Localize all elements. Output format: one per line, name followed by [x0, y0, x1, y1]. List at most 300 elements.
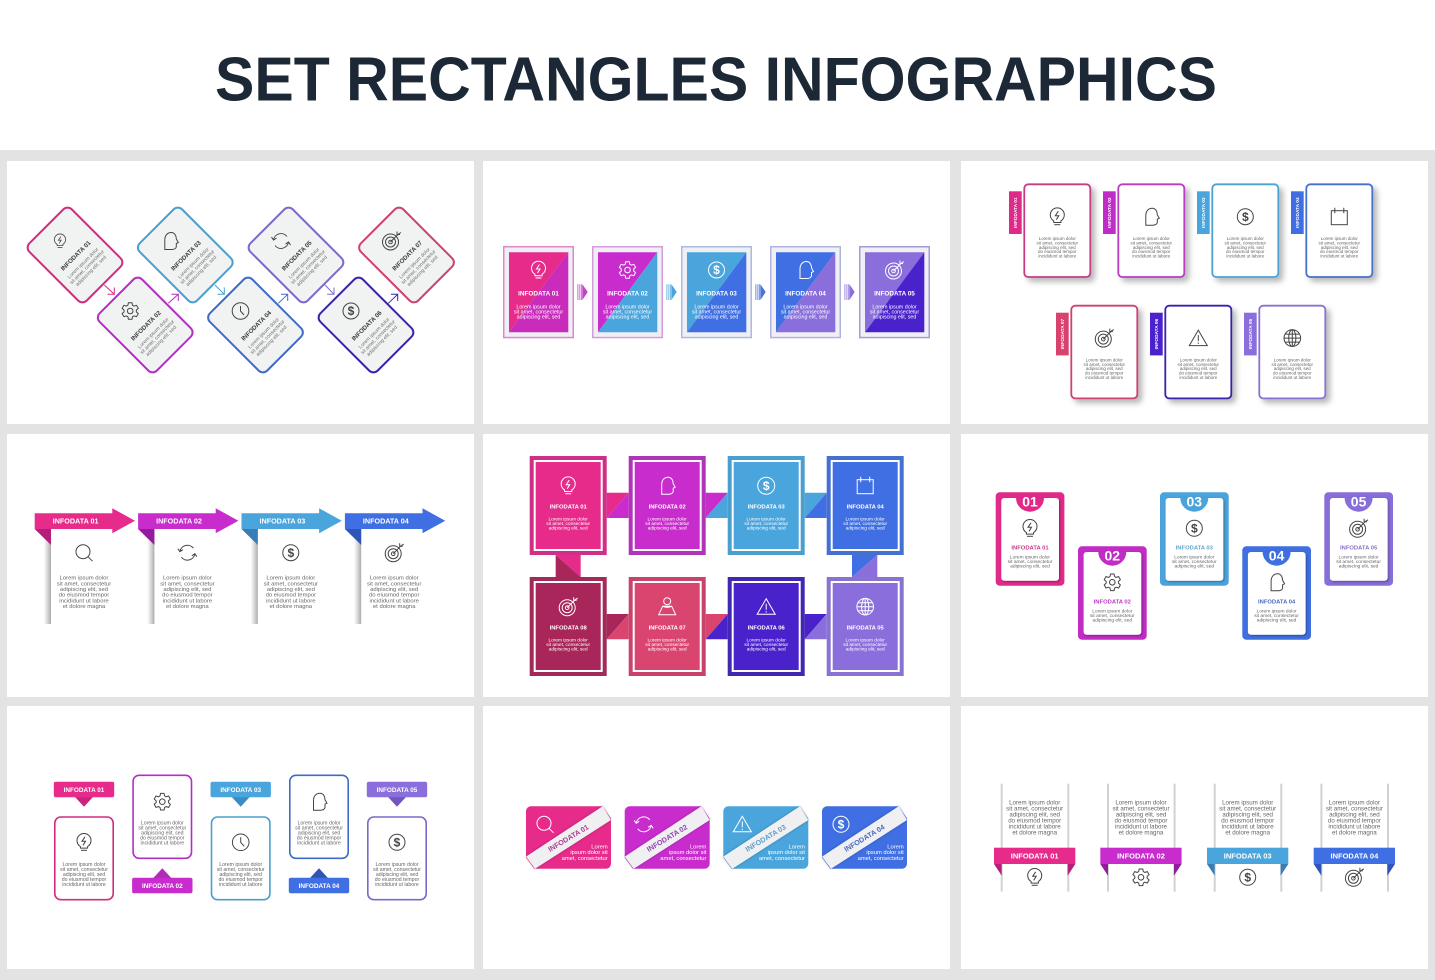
card 02 text: sit amet, consectetur — [1090, 613, 1135, 619]
column 01 text: do eiusmod tempor — [1008, 817, 1061, 824]
panel: outlined cards with vertical tags — [961, 161, 1428, 424]
card 06 text: adipiscing elit, sed — [1180, 366, 1217, 371]
card 05 text — [1336, 546, 1381, 570]
icon: target — [1095, 329, 1114, 347]
card 04 text: Lorem ipsum dolor — [1257, 608, 1297, 614]
card 03 — [722, 805, 809, 870]
card 04 text: adipiscing elit, sed — [1321, 245, 1358, 250]
connector 06 to 07 — [706, 614, 728, 639]
card 04 text: INFODATA 04 — [240, 309, 273, 342]
card 07 text: Lorem ipsum dolor — [1086, 358, 1123, 363]
card 03 text: sit amet, consectetur — [692, 309, 741, 315]
icon: target — [1345, 868, 1364, 886]
card 01 text: amet, consectetur — [562, 856, 608, 862]
item 03 — [210, 782, 271, 900]
card 06 text: sit amet, consectetur — [1178, 362, 1220, 367]
card 01 — [525, 805, 612, 870]
item 05 text: Lorem ipsum dolor — [376, 862, 419, 868]
column 04 text: sit amet, consectetur — [1326, 805, 1383, 812]
icon: head — [1271, 574, 1285, 591]
icon: target — [382, 232, 401, 250]
step 04 text: do eiusmod tempor — [369, 593, 419, 599]
item 01 text: incididunt ut labore — [62, 882, 106, 888]
card 01 text: adipiscing elit, sed — [1010, 564, 1050, 570]
number tab 02: 02 — [1105, 548, 1120, 564]
step 03 text: do eiusmod tempor — [266, 593, 316, 599]
card 05 text: INFODATA 05 — [847, 626, 885, 632]
column 02 text: sit amet, consectetur — [1112, 805, 1170, 812]
card 01 text: incididunt ut labore — [1038, 253, 1077, 258]
card 07 text: sit amet, consectetur — [645, 642, 690, 648]
icon: dollar: $ — [838, 817, 845, 831]
item 01 text: adipiscing elit, sed — [63, 872, 105, 878]
item 04 text: do eiusmod tempor — [297, 836, 341, 842]
step 03 text: adipiscing elit, sed — [267, 587, 315, 593]
icon: bulb — [532, 261, 546, 278]
card 07 text: INFODATA 07 — [391, 239, 424, 272]
card 04 text: incididunt ut labore — [1320, 253, 1359, 258]
card 03 text: ipsum dolor sit — [768, 850, 805, 856]
card 04 text: amet, consectetur — [858, 856, 904, 862]
card 01 text: sit amet, consectetur — [69, 249, 106, 286]
card 03 text: sit amet, consectetur — [179, 249, 216, 286]
card 07 text: adipiscing elit, sed — [406, 255, 439, 288]
icon: bulb — [1050, 208, 1064, 225]
icon: warning — [733, 816, 751, 832]
column 04 text: et dolore magna — [1332, 829, 1377, 836]
step 02 text: incididunt ut labore — [163, 598, 213, 604]
card 06 text: do eiusmod tempor — [1179, 371, 1218, 376]
vertical tag 07: INFODATA 07 — [1060, 318, 1066, 349]
card 06 text: incididunt ut labore — [1179, 375, 1218, 380]
card 05 text: Lorem ipsum dolor — [1339, 554, 1379, 560]
panel background — [7, 706, 474, 969]
column 01 text: sit amet, consectetur — [1006, 805, 1063, 812]
card 02 text: adipiscing elit, sed — [145, 325, 178, 358]
panel: connected coloured squares loop — [483, 434, 950, 697]
card 01 text — [514, 290, 563, 320]
card 02 text — [1090, 600, 1135, 624]
icon: dollar: $ — [1242, 210, 1249, 224]
card 01 text: Lorem ipsum dolor — [516, 304, 561, 310]
card 03 text: Lorem ipsum dolor — [177, 246, 211, 280]
column 01 text: et dolore magna — [1012, 829, 1058, 836]
icon: dollar: $ — [1244, 870, 1251, 884]
connector 04 to 05 — [852, 555, 877, 577]
column 01 text: incididunt ut labore — [1009, 823, 1061, 830]
card 06 text: Lorem ipsum dolor — [747, 637, 786, 643]
icon: head — [800, 262, 814, 278]
arrow 6 to 7 — [388, 294, 398, 303]
icon: globe — [1284, 330, 1301, 346]
card 03 text: sit amet, consectetur — [744, 521, 789, 527]
column 03 text: Lorem ipsum dolor — [1222, 799, 1273, 806]
card 03 text: sit amet, consectetur — [1172, 559, 1217, 565]
card 04 text: sit amet, consectetur — [1254, 613, 1299, 619]
card 07 text: sit amet, consectetur — [400, 249, 438, 286]
card 05 text — [843, 626, 888, 653]
card 03 text: adipiscing elit, sed — [1175, 564, 1214, 570]
card 01 text: INFODATA 01 — [550, 504, 588, 510]
icon: dollar: $ — [348, 304, 355, 318]
ribbon 02: INFODATA 02 — [1117, 852, 1165, 861]
card 05 text: adipiscing elit, sed — [296, 255, 329, 288]
ribbon 01: INFODATA 01 — [1011, 852, 1059, 861]
card 05 text: adipiscing elit, sed — [1339, 564, 1379, 570]
card 02 text — [603, 290, 652, 320]
panel background — [961, 161, 1428, 424]
icon: bulb — [1028, 868, 1042, 885]
card 07 text: sit amet, consectetur — [1084, 362, 1126, 367]
card 04 text: Lorem ipsum dolor — [846, 516, 885, 522]
card 01 text: Lorem ipsum dolor — [549, 516, 588, 522]
card 03 text: adipiscing elit, sed — [695, 314, 738, 320]
panel background — [483, 706, 950, 969]
card 02 text: do eiusmod tempor — [1132, 249, 1171, 254]
card 04 text: adipiscing elit, sed — [1257, 618, 1297, 624]
step 04 text: sit amet, consectetur — [367, 581, 421, 587]
item 04 text: incididunt ut labore — [297, 841, 341, 847]
card 04 — [827, 456, 904, 555]
step 01 text: incididunt ut labore — [59, 598, 109, 604]
card 04 — [1291, 184, 1372, 277]
card 02 text: amet, consectetur — [660, 856, 706, 862]
icon: dollar: $ — [287, 546, 294, 560]
card 02 text: Lorem — [690, 844, 707, 850]
card 03 text: Lorem ipsum dolor — [747, 516, 786, 522]
arrow 5 to 6 — [325, 285, 334, 294]
icon: bulb — [561, 477, 575, 494]
icon: gear — [1133, 869, 1149, 886]
icon: gear — [154, 793, 170, 810]
card 05 text: Lorem ipsum dolor — [846, 637, 885, 643]
column 01 text: adipiscing elit, sed — [1009, 811, 1061, 818]
step 01 — [35, 508, 135, 624]
item 04 text: sit amet, consectetur — [295, 826, 343, 832]
card 07 text: INFODATA 07 — [649, 626, 686, 632]
card 08 text: Lorem ipsum dolor — [549, 637, 588, 643]
card 03 text: adipiscing elit, sed — [185, 255, 218, 288]
panel: ribbon columns — [961, 706, 1428, 969]
card 04 text: do eiusmod tempor — [1320, 249, 1359, 254]
panel background — [483, 434, 950, 697]
step 02 — [138, 508, 238, 624]
step 04 text: Lorem ipsum dolor — [370, 576, 419, 582]
step 01 text: Lorem ipsum dolor — [60, 576, 108, 582]
column 03 text: adipiscing elit, sed — [1222, 811, 1274, 818]
card 02 text: sit amet, consectetur — [603, 309, 652, 315]
arrow header 01: INFODATA 01 — [53, 516, 98, 525]
item 05 text: adipiscing elit, sed — [376, 872, 418, 878]
icon: gear — [619, 262, 636, 278]
step 02 text: et dolore magna — [166, 604, 209, 610]
panel: diagonal band cards — [483, 706, 950, 969]
number tab 05: 05 — [1351, 494, 1367, 510]
card 04 text — [781, 290, 830, 320]
icon: warning — [757, 599, 775, 614]
card 03 text — [744, 504, 789, 532]
card 01 text: Lorem — [591, 844, 608, 850]
pointer tag 02: INFODATA 02 — [142, 883, 183, 890]
diagonal band 03: INFODATA 03 — [744, 822, 788, 854]
card 01 text: do eiusmod tempor — [1038, 249, 1077, 254]
card 03 text: sit amet, consectetur — [1225, 241, 1267, 246]
card 04 text — [238, 307, 290, 360]
card 01 — [25, 205, 125, 305]
card 03 text — [692, 290, 741, 320]
icon: refresh — [178, 545, 197, 560]
panel background — [961, 706, 1428, 969]
card 06 text: INFODATA 06 — [351, 309, 384, 342]
card 02 text: INFODATA 02 — [130, 309, 163, 342]
step 01 text: adipiscing elit, sed — [60, 587, 108, 593]
vertical tag 05: INFODATA 05 — [1248, 318, 1254, 349]
icon: dollar: $ — [713, 263, 720, 277]
item 01 text: do eiusmod tempor — [62, 877, 106, 883]
card 03 text: amet, consectetur — [759, 856, 805, 862]
card 04 text: ipsum dolor sit — [866, 850, 904, 856]
icon: head — [314, 793, 327, 810]
card 01 text: Lorem ipsum dolor — [67, 246, 100, 280]
card 05 text: INFODATA 05 — [1340, 545, 1378, 551]
card 05 text: sit amet, consectetur — [870, 309, 919, 315]
card 01 text: adipiscing elit, sed — [517, 314, 560, 320]
item 01 — [54, 782, 114, 900]
card 06 — [1150, 306, 1231, 398]
item 04 text: Lorem ipsum dolor — [298, 821, 341, 827]
card 05 text: Lorem ipsum dolor — [1274, 358, 1311, 363]
card 02 — [95, 275, 195, 375]
card 02 text: Lorem ipsum dolor — [605, 304, 650, 310]
card 07 text: adipiscing elit, sed — [1086, 366, 1123, 371]
icon: dollar: $ — [1191, 521, 1198, 535]
card 04 text: INFODATA 04 — [847, 504, 885, 510]
icon: search — [76, 545, 92, 561]
card 04 text: INFODATA 04 — [1258, 599, 1296, 605]
number tab 03: 03 — [1187, 494, 1202, 510]
arrow 2 to 3 — [666, 284, 677, 300]
connector 08 to 01 — [556, 555, 581, 577]
icon: dollar: $ — [394, 835, 401, 849]
card 07 text: incididunt ut labore — [1085, 375, 1124, 380]
card 05 text — [870, 290, 919, 320]
panel: numbered staggered cards — [961, 434, 1428, 697]
panel background — [483, 161, 950, 424]
card 04 text — [843, 504, 888, 532]
card 06 text: adipiscing elit, sed — [366, 325, 399, 358]
icon: dollar: $ — [763, 479, 770, 493]
panel: diagonal rotated cards — [7, 161, 474, 424]
card 02 text — [127, 307, 180, 360]
card 03 text: adipiscing elit, sed — [747, 526, 786, 532]
card 06 text: Lorem ipsum dolor — [1180, 358, 1217, 363]
card 08 text: adipiscing elit, sed — [549, 647, 588, 653]
icon: target — [1350, 519, 1368, 537]
title: SET RECTANGLES INFOGRAPHICS — [215, 46, 1217, 115]
ribbon 04: INFODATA 04 — [1331, 852, 1379, 861]
column 02 text: Lorem ipsum dolor — [1115, 799, 1167, 806]
card 01 text: ipsum dolor sit — [570, 850, 608, 856]
icon: gear — [1104, 574, 1120, 591]
step 03 — [242, 508, 342, 624]
panel: arrow header steps — [7, 434, 474, 697]
icon: bulb — [1023, 519, 1037, 536]
card 08 text — [546, 626, 591, 653]
card 07 — [357, 205, 456, 305]
icon: bulb — [54, 234, 66, 247]
icon: calendar — [1331, 208, 1347, 225]
card 05 text: sit amet, consectetur — [843, 642, 888, 648]
card 06 text — [348, 307, 401, 360]
card 04 — [821, 805, 908, 870]
card 04 text: Lorem ipsum dolor — [247, 316, 281, 350]
card 02 text: INFODATA 02 — [649, 504, 687, 510]
card 03 text: Lorem — [789, 844, 805, 850]
card 01 text: sit amet, consectetur — [514, 309, 563, 315]
item 03 text: do eiusmod tempor — [218, 877, 263, 883]
card 03 text: INFODATA 03 — [696, 290, 737, 298]
column 02 text: adipiscing elit, sed — [1116, 811, 1167, 818]
item 05 text: incididunt ut labore — [375, 882, 419, 888]
pointer tag 04: INFODATA 04 — [299, 883, 340, 890]
item 02 text: sit amet, consectetur — [138, 826, 186, 832]
card 06 text — [744, 626, 789, 653]
card 01 text: Lorem ipsum dolor — [1039, 236, 1076, 241]
arrow 3 to 4 — [756, 284, 766, 300]
card 02 text: INFODATA 02 — [607, 290, 648, 298]
icon: refresh — [272, 234, 290, 248]
card 01 text: adipiscing elit, sed — [75, 255, 108, 288]
card 02 text: adipiscing elit, sed — [606, 314, 649, 320]
item 02 text: incididunt ut labore — [141, 841, 184, 847]
connector 03 to 04 — [805, 493, 827, 518]
card 05 text: incididunt ut labore — [1273, 375, 1312, 380]
card 06 text: adipiscing elit, sed — [747, 647, 786, 653]
card 07 text: adipiscing elit, sed — [648, 647, 687, 653]
arrow 1 to 2 — [578, 284, 588, 300]
card 01 text — [1008, 546, 1053, 570]
step 02 text: sit amet, consectetur — [160, 581, 215, 587]
card 02 text: Lorem ipsum dolor — [137, 316, 171, 350]
card 05 text: adipiscing elit, sed — [846, 647, 885, 653]
number tab 04: 04 — [1269, 548, 1285, 564]
card 06 text: sit amet, consectetur — [360, 319, 397, 356]
column 02 text: incididunt ut labore — [1115, 823, 1168, 830]
number tab 01: 01 — [1022, 494, 1038, 510]
card 03 — [135, 205, 235, 305]
card 01 text: sit amet, consectetur — [1008, 559, 1053, 565]
item 03 text: Lorem ipsum dolor — [219, 862, 262, 868]
step 02 text: Lorem ipsum dolor — [163, 576, 212, 582]
card 02 text: adipiscing elit, sed — [1133, 245, 1170, 250]
item 01 text: Lorem ipsum dolor — [63, 862, 106, 868]
item 01 text: sit amet, consectetur — [60, 867, 108, 873]
card 03 text — [168, 237, 220, 290]
card 02 text: Lorem ipsum dolor — [1092, 608, 1133, 614]
card 01 text: sit amet, consectetur — [1037, 241, 1079, 246]
card 02 text: sit amet, consectetur — [139, 319, 176, 356]
item 02 text: do eiusmod tempor — [140, 836, 185, 842]
card 03 text — [1172, 546, 1217, 570]
diagonal band 02: INFODATA 02 — [645, 822, 689, 854]
card 05 — [1244, 306, 1325, 398]
column 03 text: sit amet, consectetur — [1219, 805, 1276, 812]
card 08 — [530, 577, 607, 676]
column 04 — [1314, 784, 1395, 892]
icon: globe — [857, 598, 874, 615]
card 01 text — [546, 504, 591, 532]
step 03 text: incididunt ut labore — [266, 598, 316, 604]
connector 05 to 06 — [805, 614, 827, 639]
column 02 text: et dolore magna — [1119, 829, 1164, 836]
card 04 text: sit amet, consectetur — [843, 521, 888, 527]
card 08 text: INFODATA 08 — [550, 626, 588, 632]
card 01 — [530, 456, 607, 555]
arrow header 03: INFODATA 03 — [260, 516, 305, 525]
card 03 text: INFODATA 03 — [748, 504, 786, 510]
column 04 text: do eiusmod tempor — [1328, 817, 1381, 824]
vertical tag 01: INFODATA 01 — [1013, 197, 1019, 228]
pointer tag 01: INFODATA 01 — [64, 787, 105, 794]
card 04 text: adipiscing elit, sed — [846, 526, 885, 532]
card 04 text: INFODATA 04 — [785, 290, 826, 298]
card 02 text: incididunt ut labore — [1132, 253, 1171, 258]
card 05 text: INFODATA 05 — [281, 239, 314, 272]
arrow 4 to 5 — [278, 294, 288, 303]
step 02 text: do eiusmod tempor — [162, 593, 213, 599]
card 01 — [503, 246, 574, 338]
step 01 text: et dolore magna — [63, 604, 106, 610]
card 04 text: adipiscing elit, sed — [784, 314, 827, 320]
diagonal band 01: INFODATA 01 — [546, 822, 590, 854]
card 05 text: Lorem ipsum dolor — [288, 246, 321, 280]
step 01 text: sit amet, consectetur — [57, 581, 111, 587]
panel background — [961, 434, 1428, 697]
card 04 text: Lorem ipsum dolor — [1321, 236, 1358, 241]
step 03 text: et dolore magna — [270, 604, 313, 610]
card 04 — [770, 246, 841, 338]
card 05 — [1324, 492, 1393, 586]
vertical tag 03: INFODATA 03 — [1201, 197, 1207, 228]
card 07 — [1056, 306, 1137, 398]
step 03 text: sit amet, consectetur — [264, 581, 318, 587]
card 05 text — [278, 237, 331, 290]
item 05 text: do eiusmod tempor — [375, 877, 419, 883]
diagonal band 04: INFODATA 04 — [842, 822, 886, 854]
card 08 text: sit amet, consectetur — [546, 642, 591, 648]
card 06 — [728, 577, 805, 676]
card 03 text: INFODATA 03 — [1176, 545, 1214, 551]
arrow 1 to 2 — [104, 285, 114, 294]
icon: calendar — [857, 477, 873, 494]
card 04 text: Lorem — [887, 844, 904, 850]
card 03 — [728, 456, 805, 555]
card 02 — [624, 805, 711, 870]
icon: search — [537, 816, 554, 833]
card 01 — [996, 492, 1064, 586]
card 05 — [246, 205, 346, 305]
card 07 text: Lorem ipsum dolor — [648, 637, 687, 643]
card 01 text: adipiscing elit, sed — [549, 526, 588, 532]
card 02 — [629, 456, 706, 555]
vertical tag 02: INFODATA 02 — [1107, 197, 1113, 228]
card 07 — [629, 577, 706, 676]
item 04 text: adipiscing elit, sed — [298, 831, 340, 837]
icon: clock — [232, 834, 249, 851]
card 01 — [1009, 184, 1090, 277]
card 02 text: Lorem ipsum dolor — [1133, 236, 1170, 241]
card 02 text — [645, 504, 690, 532]
